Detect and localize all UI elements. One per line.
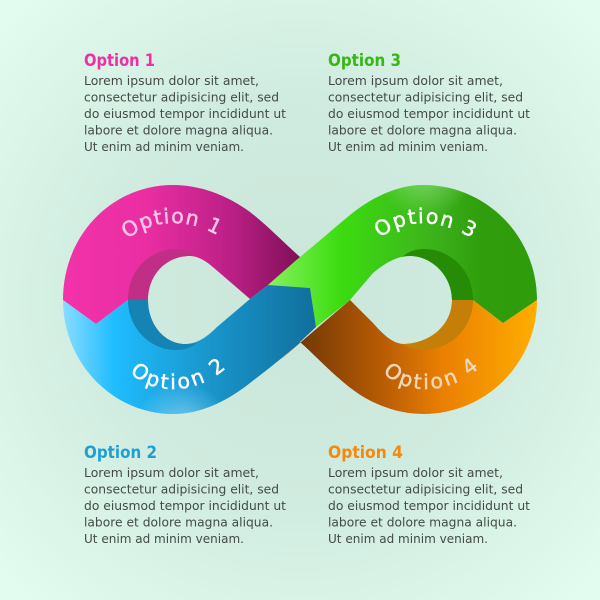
text block: option 2: Option 2 <box>84 443 157 462</box>
text block: option 3: labore et dolore magna aliqua. <box>328 122 517 138</box>
text block: option 3: do eiusmod tempor incididunt ut <box>328 106 530 121</box>
ring shadow: pink <box>128 249 198 300</box>
text block: option 2: do eiusmod tempor incididunt ut <box>84 498 286 513</box>
infinity loop diagram <box>63 185 537 414</box>
text block: option 3: Lorem ipsum dolor sit amet, <box>328 73 503 88</box>
text block: option 4: labore et dolore magna aliqua. <box>328 514 517 530</box>
ring shadow: blue <box>128 300 198 350</box>
text block: option 1: do eiusmod tempor incididunt ut <box>84 106 286 121</box>
segment: option 3 green <box>268 180 537 327</box>
text block: option 4: Lorem ipsum dolor sit amet, <box>328 465 503 480</box>
text block: option 3: Ut enim ad minim veniam. <box>328 139 488 154</box>
text block: option 2: Ut enim ad minim veniam. <box>84 531 244 546</box>
text block: option 1: labore et dolore magna aliqua. <box>84 122 273 138</box>
text block: option 4: consectetur adipisicing elit, sed <box>328 482 523 496</box>
text block: option 4 <box>328 443 530 546</box>
text block: option 1: Ut enim ad minim veniam. <box>84 139 244 154</box>
text block: option 1: consectetur adipisicing elit, sed <box>84 90 279 104</box>
label: option 2 on band: Option 2 <box>132 359 225 390</box>
label: option 3 on band: Option 3 <box>375 207 476 236</box>
text block: option 4: do eiusmod tempor incididunt ut <box>328 498 530 513</box>
text block: option 3 <box>328 51 530 154</box>
text block: option 2 <box>84 443 286 546</box>
ring shadow: orange <box>402 300 473 350</box>
text block: option 4: Option 4 <box>328 443 403 462</box>
text block: option 1 <box>84 51 286 154</box>
ring shadow: green <box>402 249 473 300</box>
label: option 1 on band: Option 1 <box>122 208 220 236</box>
text block: option 1: Option 1 <box>84 51 155 70</box>
text block: option 1: Lorem ipsum dolor sit amet, <box>84 73 259 88</box>
segment: option 4 orange <box>280 300 537 414</box>
text block: option 2: Lorem ipsum dolor sit amet, <box>84 465 259 480</box>
text block: option 4: Ut enim ad minim veniam. <box>328 531 488 546</box>
text block: option 3: Option 3 <box>328 51 401 70</box>
segment: option 1 pink <box>63 185 300 324</box>
segment: option 2 blue <box>63 285 316 420</box>
text block: option 2: consectetur adipisicing elit, sed <box>84 482 279 496</box>
text block: option 3: consectetur adipisicing elit, sed <box>328 90 523 104</box>
text block: option 2: labore et dolore magna aliqua. <box>84 514 273 530</box>
label: option 4 on band: Option 4 <box>386 358 477 390</box>
